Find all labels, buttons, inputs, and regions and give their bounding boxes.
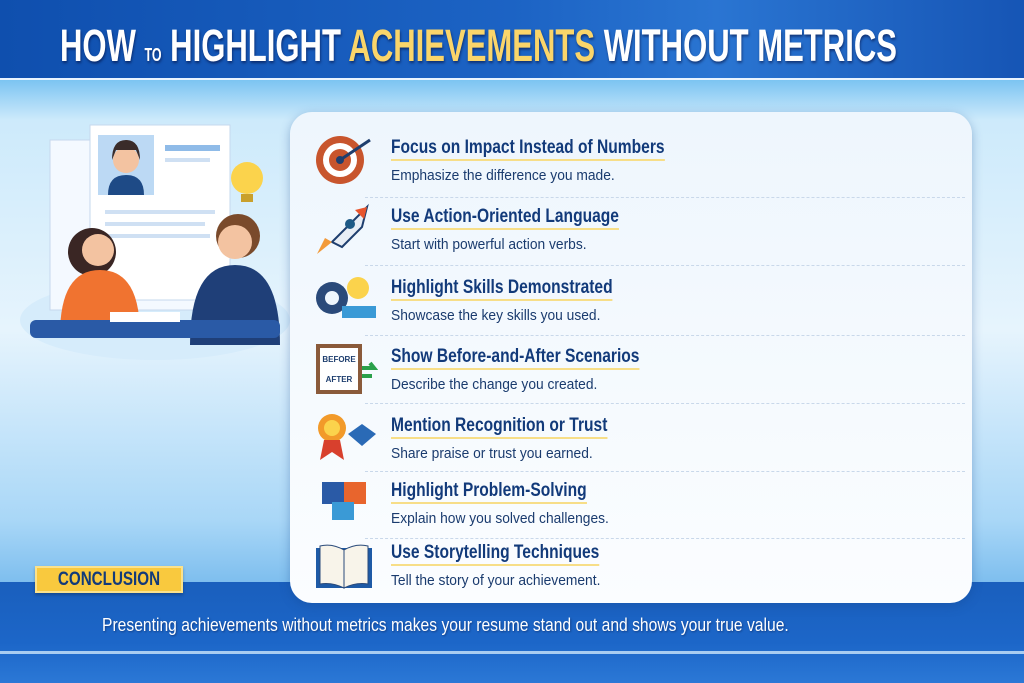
icon: puzzle <box>322 482 366 520</box>
tip 6: Highlight Problem-Solving <box>391 480 587 501</box>
conclusion badge <box>35 566 183 593</box>
tip 7: Use Storytelling Techniques <box>391 542 599 563</box>
tip 1 <box>391 137 665 184</box>
icon: target <box>316 136 371 184</box>
icon: clipboard: AFTER <box>326 375 353 384</box>
lower blue band <box>0 582 1024 683</box>
tip 7: Tell the story of your achievement. <box>391 572 600 589</box>
title: HOW TO HIGHLIGHT ACHIEVEMENTS WITHOUT METRICS <box>60 20 897 71</box>
illustration: interview <box>20 124 290 354</box>
tip 2: Start with powerful action verbs. <box>391 236 587 253</box>
tip 3 <box>391 277 613 324</box>
tip 4 <box>391 346 640 393</box>
icon: clipboard <box>316 344 378 394</box>
icon: rocket <box>317 204 369 254</box>
tip 2: Use Action-Oriented Language <box>391 206 619 227</box>
tip 6 <box>391 480 609 527</box>
conclusion badge: CONCLUSION <box>58 569 160 590</box>
tip 4: Describe the change you created. <box>391 376 597 393</box>
tip 5: Share praise or trust you earned. <box>391 445 593 462</box>
icon: book <box>316 544 372 589</box>
icon: gear and bulb <box>316 277 376 318</box>
tip 3: Showcase the key skills you used. <box>391 307 600 324</box>
tip 1: Focus on Impact Instead of Numbers <box>391 137 665 158</box>
icon: medal and handshake <box>318 414 376 460</box>
tip 2 <box>391 206 619 253</box>
icon: clipboard: BEFORE <box>322 355 356 364</box>
conclusion text: Presenting achievements without metrics makes your resume stand out and shows your true value. <box>102 615 789 635</box>
tip 3: Highlight Skills Demonstrated <box>391 277 613 298</box>
header band <box>0 0 1024 80</box>
panel: tips <box>290 112 972 603</box>
tip 6: Explain how you solved challenges. <box>391 510 609 527</box>
tip 1: Emphasize the difference you made. <box>391 167 615 184</box>
tip 4: Show Before-and-After Scenarios <box>391 346 639 367</box>
tip 7 <box>391 542 600 589</box>
tip 5 <box>391 415 608 462</box>
tip 5: Mention Recognition or Trust <box>391 415 607 436</box>
